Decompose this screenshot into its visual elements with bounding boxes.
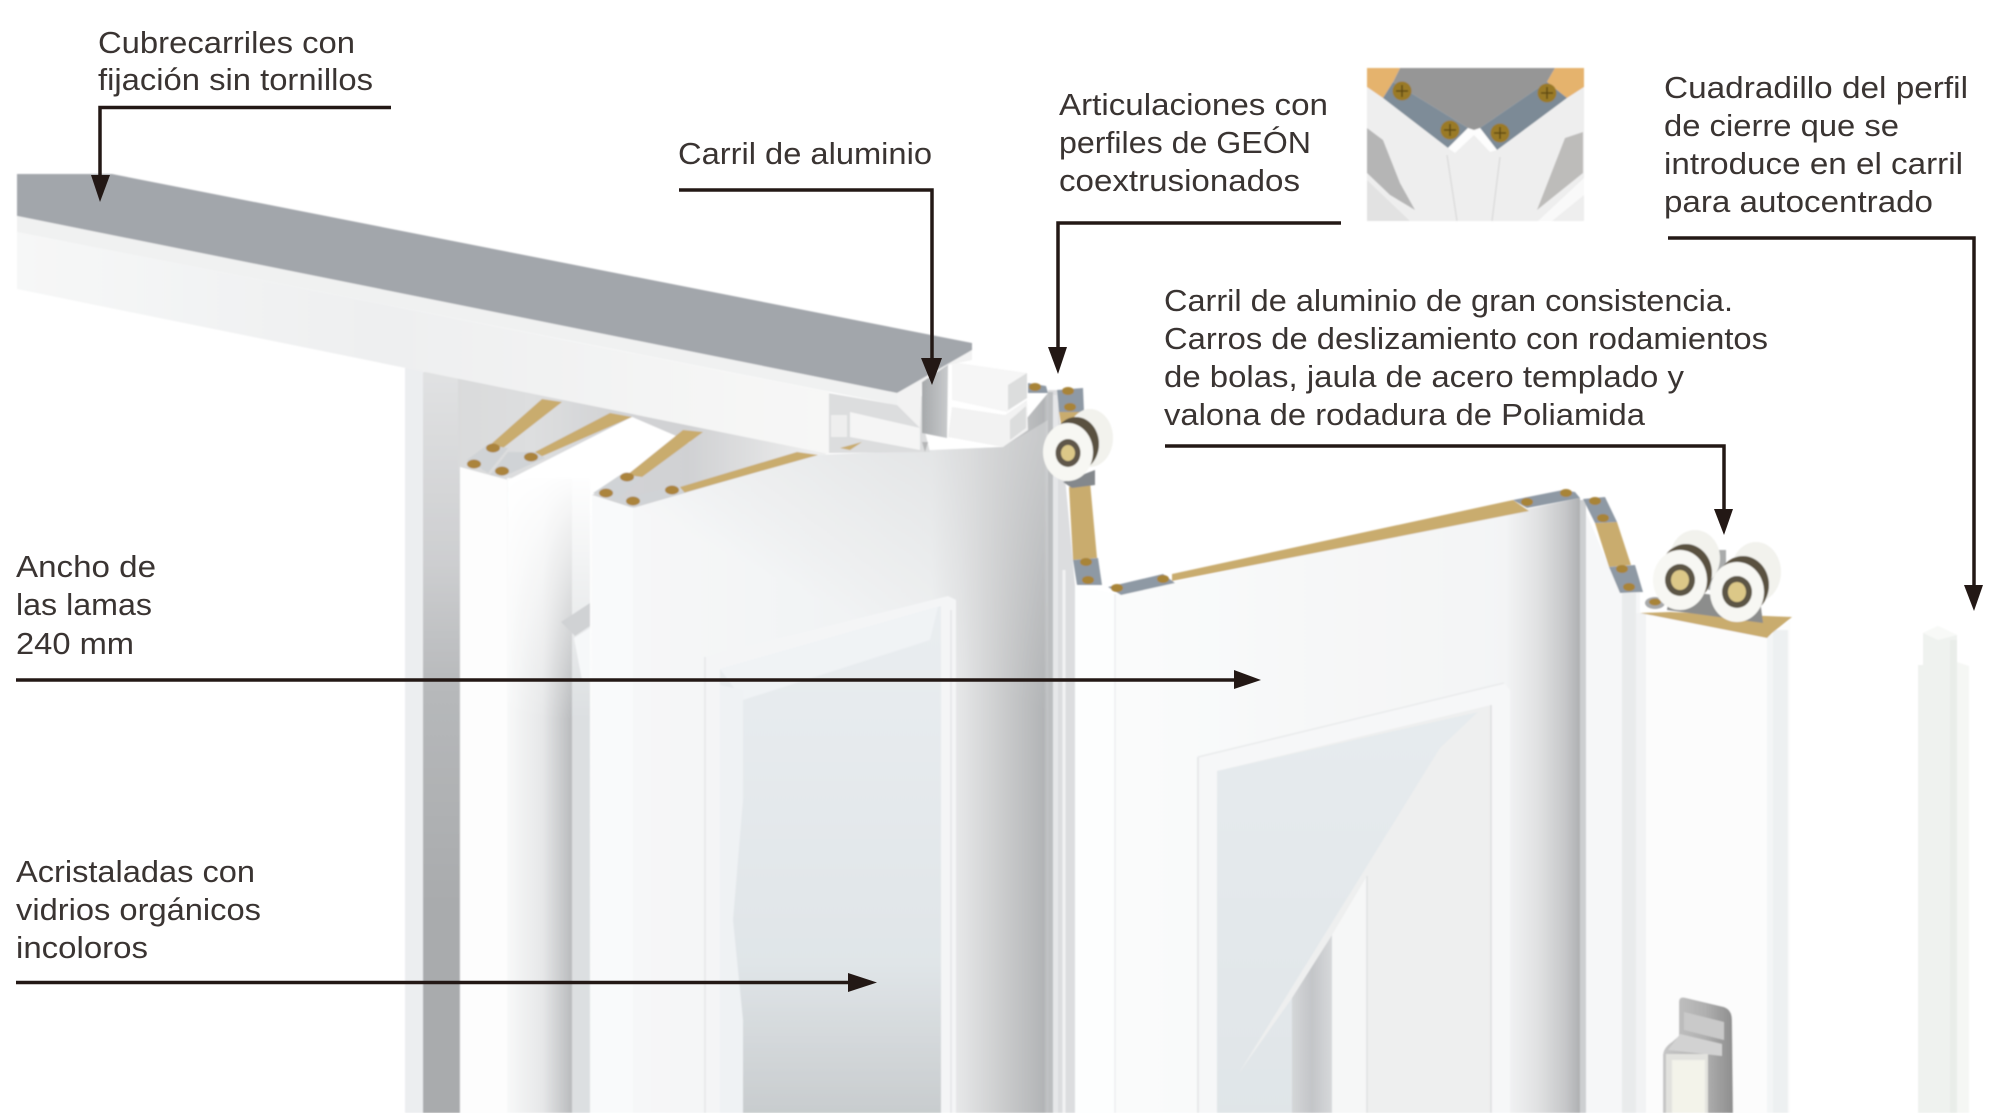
text: Carril de gran consistencia: Carros de deslizamiento con rodamientos	[1164, 321, 1768, 356]
folded leaf 1	[460, 417, 690, 1113]
shaded gap behind the folded leaves	[458, 376, 830, 520]
text: Carril de gran consistencia: valona de rodadura de Poliamida	[1164, 397, 1646, 432]
text: Articulaciones	[1059, 87, 1328, 198]
callout: Articulaciones	[1048, 87, 1341, 374]
text: Articulaciones: perfiles de GEÓN	[1059, 125, 1311, 160]
hinge and strip on leaf 3 top	[1108, 489, 1580, 595]
text: Carril de gran consistencia: de bolas, jaula de acero templado y	[1164, 359, 1685, 394]
rail cover	[17, 174, 972, 454]
wall jamb	[405, 368, 460, 1113]
text: Cuadradillo: introduce en el carril	[1664, 146, 1963, 181]
thumbnail: hinge close-up	[1367, 68, 1584, 221]
callout: Ancho de las lamas	[16, 549, 1261, 689]
arrow: Carros de deslizamiento	[1165, 446, 1733, 535]
arrow: Acristaladas	[16, 973, 877, 992]
text: Articulaciones: coextrusionados	[1059, 163, 1300, 198]
end boxes of the inner track	[948, 362, 1028, 447]
text: Cuadradillo: Cuadradillo del perfil	[1664, 70, 1968, 105]
hinge plates with screws on folded leaves	[467, 444, 685, 507]
inner rail section under the cover	[828, 365, 948, 453]
narrow edge strip between leaf 2 and leaf 3	[1048, 390, 1075, 1113]
arrow: Ancho de las lamas	[16, 670, 1261, 689]
text: Acristaladas	[16, 854, 261, 965]
text: Cubrecarriles	[98, 25, 373, 97]
arrow: Carril de aluminio	[679, 190, 942, 385]
text: Carril de gran consistencia: Carril de aluminio de gran consistencia.	[1164, 283, 1733, 318]
arrow: Cuadradillo	[1668, 238, 1983, 611]
text: Ancho de las lamas: las lamas	[16, 587, 152, 622]
callout: Acristaladas	[16, 854, 877, 992]
hinge plates and strip on the fold	[1583, 497, 1643, 593]
folded leaf 2 with glazing	[590, 393, 1048, 1113]
end leaf 4	[1636, 613, 1790, 1113]
text: Cuadradillo	[1664, 70, 1968, 219]
text: Cuadradillo: de cierre que se	[1664, 108, 1899, 143]
text: Ancho de las lamas: Ancho de	[16, 549, 156, 584]
tan coextruded strips on folded leaves	[490, 399, 818, 493]
text: Acristaladas: Acristaladas con	[16, 854, 255, 889]
fold between leaf 3 and leaf 4	[1580, 500, 1640, 1113]
text: Articulaciones: Articulaciones con	[1059, 87, 1328, 122]
arrow: Articulaciones	[1048, 223, 1341, 374]
text: Acristaladas: vidrios orgánicos	[16, 892, 261, 927]
callout: Carros de deslizamiento	[1164, 283, 1768, 535]
text: Cuadradillo: para autocentrado	[1664, 184, 1933, 219]
carriage with four wheels on leaf 4	[1640, 530, 1792, 638]
callout: Cubrecarriles	[91, 25, 391, 202]
leaf 3 with glazing	[1075, 498, 1580, 1113]
text: Cubrecarriles: Cubrecarriles con	[98, 25, 355, 60]
closing profile with centring square	[1918, 626, 1969, 1113]
callout: Cuadradillo	[1664, 70, 1983, 611]
text: Cubrecarriles: fijación sin tornillos	[98, 62, 373, 97]
arrow: Cubrecarriles	[91, 108, 391, 202]
text: Carril de gran consistencia	[1164, 283, 1768, 432]
first wheel carriage and hinge on the right of leaf 2	[1028, 383, 1113, 585]
text: Carril de aluminio: Carril de aluminio	[678, 136, 932, 171]
text: Ancho de las lamas: 240 mm	[16, 626, 134, 661]
text: Acristaladas: incoloros	[16, 930, 148, 965]
handle	[1663, 998, 1733, 1113]
text: Ancho de las lamas	[16, 549, 156, 661]
callout: Carril de aluminio	[678, 136, 942, 385]
